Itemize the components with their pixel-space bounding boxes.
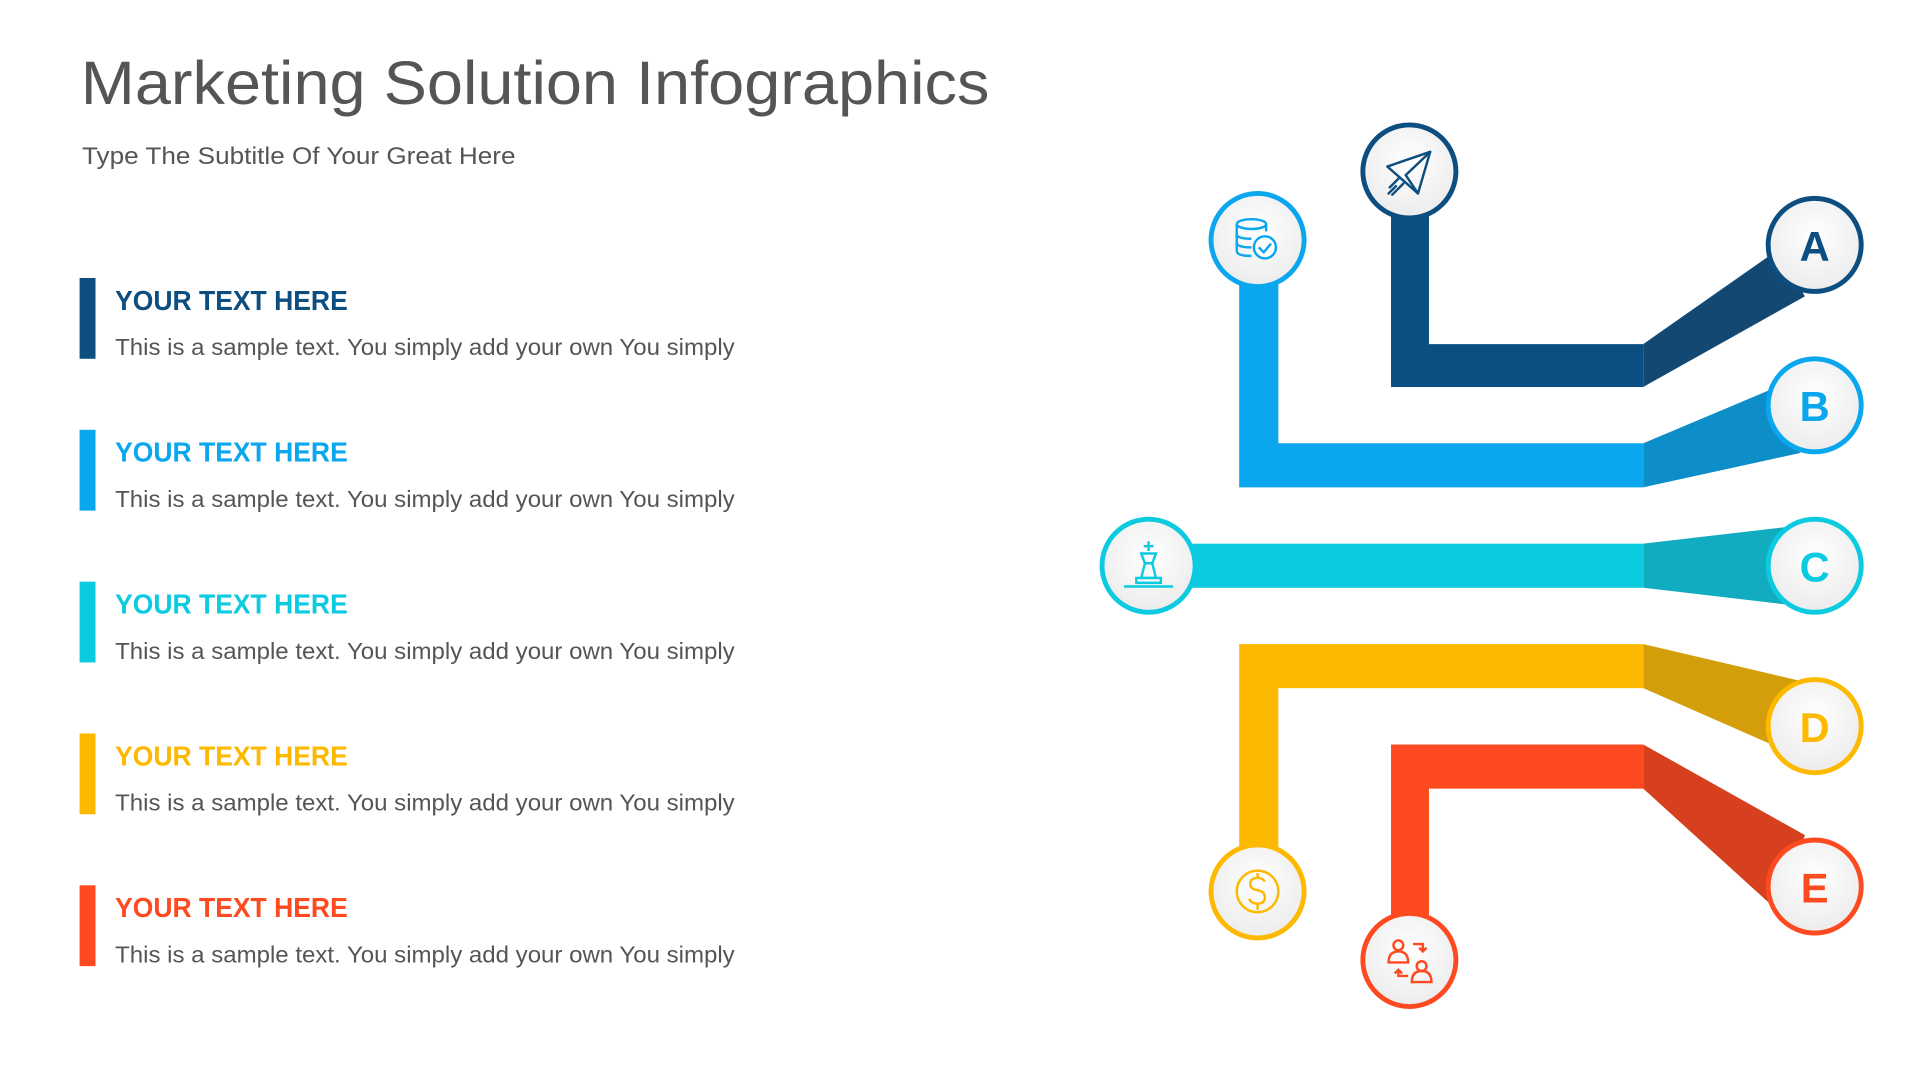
subtitle: Type The Subtitle Of Your Great Here (82, 143, 516, 170)
text block C: YOUR TEXT HERE (115, 588, 348, 619)
path C (1176, 527, 1790, 605)
text block B (80, 430, 735, 512)
text block E: YOUR TEXT HERE (115, 892, 348, 923)
text block B: This is a sample text. You simply add your own You simply (115, 486, 735, 512)
path B (1239, 276, 1800, 487)
icon: database check (1211, 193, 1304, 287)
text block E (80, 885, 735, 967)
title: Marketing Solution Infographics (81, 49, 989, 117)
text block D: This is a sample text. You simply add your own You simply (115, 790, 735, 816)
circle C: C (1800, 544, 1830, 591)
text block D (80, 733, 735, 816)
circle A (1768, 198, 1861, 291)
circle D (1768, 680, 1861, 773)
path A (1391, 208, 1805, 387)
path E (1391, 744, 1805, 924)
text block A: This is a sample text. You simply add your own You simply (115, 334, 735, 360)
circle B (1768, 359, 1861, 452)
icon: people exchange (1363, 913, 1456, 1007)
text block E: This is a sample text. You simply add your own You simply (115, 941, 735, 967)
text block C (80, 582, 735, 664)
icon: dollar coin (1211, 845, 1304, 938)
circle D: D (1800, 704, 1830, 751)
diagram (1102, 125, 1861, 1007)
path D (1239, 644, 1800, 857)
circle B: B (1800, 383, 1830, 430)
circle A: A (1800, 223, 1830, 270)
text block B: YOUR TEXT HERE (115, 437, 348, 468)
icon: chess king (1102, 519, 1195, 612)
text block C: This is a sample text. You simply add your own You simply (115, 638, 735, 664)
text block D: YOUR TEXT HERE (115, 740, 348, 771)
circle C (1768, 519, 1861, 612)
text block A (80, 278, 735, 360)
icon: paper plane (1363, 125, 1456, 218)
circle E (1768, 840, 1861, 933)
circle E: E (1801, 864, 1829, 911)
text block A: YOUR TEXT HERE (115, 285, 348, 316)
